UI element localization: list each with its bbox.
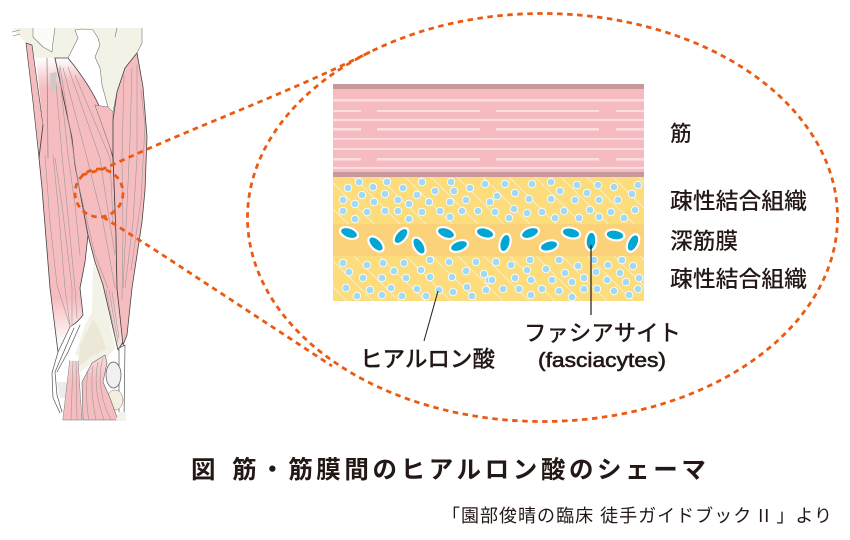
muscle: outer sliver [26,43,43,158]
illustration: leg muscles [12,28,147,421]
layer label: muscle: 筋 [670,122,692,146]
hyaluronic acid dots [339,178,643,301]
layer label: connective tissue lower: 疎性結合組織 [670,267,807,292]
label: fasciacytes [524,321,681,372]
fasciacyte cells [337,223,643,258]
label: hyaluronic acid: ヒアルロン酸 [360,347,495,372]
layer label: deep fascia: 深筋膜 [670,229,738,254]
source note: 「園部俊晴の臨床 徒手ガイドブック II 」より [442,505,832,526]
title: 筋・筋膜間のヒアルロン酸のシェーマ [232,456,709,484]
femoral condyle [107,390,123,410]
title: 図 [191,457,216,484]
lower leg muscle: tibialis [63,360,82,420]
label: fasciacytes: (fasciacytes) [538,350,666,372]
muscle: rectus femoris [55,58,123,350]
knee capsule cream [75,262,115,372]
pelvis and femur bones [12,28,142,112]
knee white tendons [52,320,83,420]
leader line: hyaluronic acid [424,291,438,341]
layer label: connective tissue upper: 疎性結合組織 [670,189,807,214]
muscle: vastus lateralis [36,58,88,352]
deep fascia layer [333,224,644,256]
muscle layer [333,84,644,177]
connective tissue layers [333,177,644,301]
muscle: small wedge [95,105,113,156]
leader line: fasciacytes [590,245,592,315]
panel: tissue layer schema [333,84,644,301]
muscle: vastus medialis [113,53,147,345]
patella [106,362,121,388]
muscle fibre lines [45,65,145,342]
fan tendon at hip [50,73,57,92]
label: fasciacytes: ファシアサイト [524,321,681,346]
lower leg muscle: gastrocnemius [82,355,118,420]
big magnifying ellipse and connectors [75,14,838,422]
